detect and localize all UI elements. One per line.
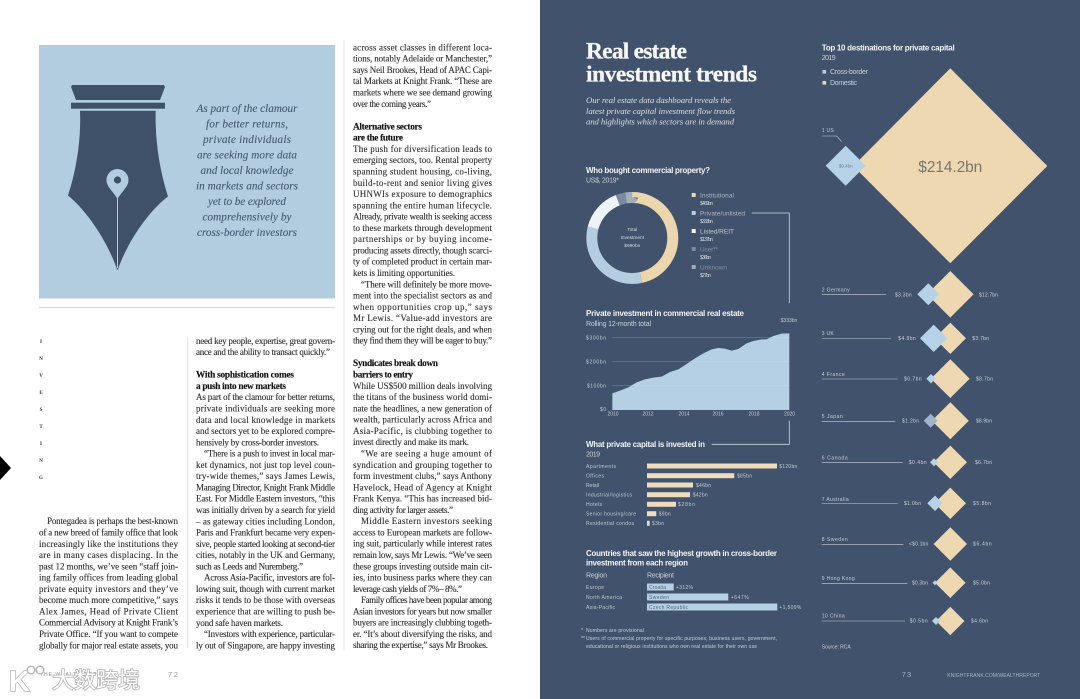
diamond: 8 Sweden: $6.4bn — [973, 542, 992, 548]
growth table bars: Czech Republic — [649, 605, 688, 611]
subheading: Alternative sectors are the future — [353, 122, 422, 144]
article column 1: are in many cases displacing. In the — [39, 550, 178, 560]
donut chart: total investment: Total — [627, 227, 637, 233]
vertical section label: INVESTING: E — [39, 391, 43, 396]
article column 3: kets is limiting opportunities. — [353, 268, 455, 278]
article column 3: access to European markets are follow- — [353, 527, 492, 537]
article column 3: Middle Eastern investors seeking — [361, 516, 492, 526]
article column 3: these groups investing outside main cit- — [353, 561, 492, 571]
area chart: 2020 — [784, 412, 795, 418]
subheading: Alternative sectors are the future: Alternative sectors — [353, 122, 422, 132]
footnotes — [581, 628, 777, 650]
heading: countries: Countries that saw the highest growth in cross-border — [586, 549, 777, 558]
vertical section label: INVESTING: S — [40, 408, 43, 413]
area chart: 2012 — [642, 412, 654, 418]
article column 3: ty of completed product in certain mar- — [353, 257, 492, 267]
diamond: 5 Japan — [822, 402, 992, 439]
article column 3: wealth, particularly across Africa and — [353, 415, 492, 425]
article column 1: ing family offices from leading global — [39, 573, 178, 583]
footnotes: * — [581, 628, 583, 634]
article column 2: was initially driven by a search for yield — [196, 505, 336, 515]
article column 3 — [353, 42, 492, 650]
bar chart: sectors: Industrial/logistics — [586, 492, 632, 498]
article column 3: Mr Lewis. “Value-add investors are — [353, 313, 492, 323]
panel: pen nib pull quote — [39, 45, 335, 298]
icon: fountain pen nib with location pin — [68, 85, 168, 270]
subheading: With sophistication comes a push into new markets — [196, 371, 294, 392]
left page footer: 72 — [168, 670, 178, 679]
intro text: Our real estate data dashboard reveals the — [586, 95, 731, 105]
legend: cross-border and domestic — [822, 69, 869, 87]
vertical section label: INVESTING: V — [39, 374, 43, 379]
article column 1: Commercial Advisory at Knight Frank’s — [39, 618, 178, 628]
heading: countries — [586, 549, 777, 568]
pull quote text: private individuals — [202, 134, 292, 146]
article column 3: leverage cash yields of 7%– 8%.” — [353, 584, 462, 594]
area chart — [586, 318, 798, 418]
article column 2: lowing suit, though with current market — [196, 584, 335, 594]
diamond: 1 US: $214.2bn — [918, 159, 982, 176]
bar chart: sectors: $28bn — [678, 502, 695, 508]
donut legend: $27bn — [700, 273, 711, 279]
article column 2: Managing Director, Knight Frank Middle — [196, 482, 335, 492]
article column 3: While US$500 million deals involving — [353, 381, 492, 391]
bar chart: sectors: Offices — [586, 474, 604, 480]
panel: countries with highest growth — [586, 549, 802, 611]
diamond: 4 France: 4 France — [822, 372, 845, 378]
diamond: 1 US: 1 US — [822, 128, 834, 134]
article column 3: partnerships or by buying income- — [353, 234, 492, 244]
article column 3: they find them they will be eager to buy.” — [353, 336, 492, 346]
article column 3: emerging sectors, too. Rental property — [353, 155, 492, 165]
heading: private investment — [586, 309, 745, 328]
vertical section label: INVESTING: G — [39, 476, 43, 481]
bar chart: sectors: $120bn — [779, 464, 798, 470]
article column 1: Pontegadea is perhaps the best-known — [47, 516, 178, 526]
diamond: 2 Germany: 2 Germany — [822, 288, 850, 294]
article column 1: Alex James, Head of Private Client — [39, 606, 178, 616]
article column 2: private individuals are seeking more — [196, 404, 335, 414]
diamond: 8 Sweden: <$0.1bn — [909, 542, 929, 548]
vertical section label: INVESTING: I — [40, 340, 42, 345]
heading: private investment: Private investment in commercial real estate — [586, 309, 745, 318]
diamond: 6 Canada — [822, 446, 992, 479]
donut legend: Listed/REIT — [700, 228, 734, 235]
article column 3: er. “It’s about diversifying the risks, and — [353, 629, 492, 639]
article column 2: experience that are willing to push be- — [196, 606, 335, 616]
donut legend: User** — [700, 246, 718, 253]
article column 2 — [195, 336, 336, 650]
article column 3: syndication and grouping together to — [353, 460, 492, 470]
left page footer — [40, 670, 178, 679]
footnotes: Users of commercial property for specific purposes; business users, government, — [586, 636, 777, 642]
pull quote text: As part of the clamour — [196, 103, 298, 115]
article column 3: Already, private wealth is seeking access — [353, 212, 492, 222]
article column 3: invest directly and make its mark. — [353, 437, 469, 447]
icon: black section arrow — [0, 456, 11, 480]
article column 3: Frank Kenya. “This has increased bid- — [353, 494, 492, 504]
diamond: 7 Australia: $5.8bn — [973, 501, 991, 507]
heading: who bought: Who bought commercial property? — [586, 166, 710, 175]
title: Real estate investment trends: investment trends — [586, 62, 757, 88]
article column 2: such as Leeds and Nuremberg.” — [196, 561, 303, 571]
article column 2: Paris and Frankfurt became very expen- — [196, 528, 335, 538]
donut legend: $36bn — [700, 255, 711, 261]
bar chart: sectors: Residential condos — [586, 521, 634, 527]
heading: top 10 destinations — [822, 44, 955, 62]
bar chart: sectors — [586, 464, 798, 527]
diamond: 3 UK: 3 UK — [822, 331, 834, 337]
pull quote text: are seeking more data — [197, 150, 297, 162]
article column 3: the titans of the business world domi- — [353, 392, 492, 402]
bar chart: sectors: Retail — [586, 483, 599, 489]
pull quote text: yet to be explored — [207, 196, 286, 208]
right page footer — [902, 670, 1040, 679]
article column 3: says Neil Brookes, Head of APAC Capi- — [353, 65, 492, 75]
diamond: 5 Japan: $8.9bn — [976, 418, 992, 424]
article column 2: As part of the clamour for better returns, — [196, 392, 335, 402]
bar chart: sectors: $42bn — [693, 492, 708, 498]
donut legend — [692, 192, 745, 279]
vertical section label: INVESTING: I — [40, 442, 42, 447]
growth table bars: Asia-Pacific — [586, 605, 616, 611]
footnotes: Numbers are provisional — [586, 628, 644, 634]
article column 2: “There is a push to invest in local mar- — [204, 449, 335, 459]
legend: cross-border and domestic: Cross-border — [830, 69, 869, 76]
heading: top 10 destinations: 2019 — [822, 55, 836, 62]
article column 1: of a new breed of family office that look — [39, 528, 178, 538]
diamond: 5 Japan: $1.2bn — [902, 418, 919, 424]
donut legend: Institutional — [700, 192, 735, 199]
growth table bars: +312% — [676, 585, 694, 591]
vertical section label: INVESTING: T — [39, 425, 43, 430]
diamond: 9 Hong Kong: $0.3bn — [912, 580, 928, 586]
article column 3: spanning the entire human lifecycle. — [353, 200, 492, 210]
area chart: $100bn — [587, 383, 606, 389]
article column 1: private equity investors and they’ve — [39, 584, 178, 594]
growth table bars: Sweden — [649, 595, 669, 601]
diamond: 2 Germany: $12.7bn — [979, 292, 998, 298]
article column 2: – as gateway cities including London, — [195, 516, 335, 526]
growth table bars — [586, 572, 802, 611]
heading: who bought — [586, 166, 710, 184]
area chart: $200bn — [586, 359, 606, 365]
diamond: 7 Australia: $1.0bn — [904, 501, 921, 507]
diamond: 10 China: $0.5bn — [910, 619, 928, 625]
heading: what private capital: What private capital is invested in — [586, 440, 705, 449]
bar chart: sectors: $85bn — [737, 474, 752, 480]
article column 3: Asian investors for years but now smaller — [353, 606, 492, 616]
bar chart: sectors: $46bn — [696, 483, 711, 489]
article column 3: Havelock, Head of Agency at Knight — [353, 482, 492, 492]
area chart: $300bn — [586, 336, 606, 342]
watermark: 大数跨境 logo: K — [9, 666, 30, 698]
subheading: With sophistication comes a push into new markets: a push into new markets — [196, 382, 286, 392]
article column 2: East. For Middle Eastern investors, “this — [196, 494, 335, 504]
subheading: Syndicates break down barriers to entry — [353, 359, 439, 380]
diamond: 10 China: $4.6bn — [971, 619, 988, 625]
diamond: 7 Australia — [822, 488, 991, 519]
bar chart: sectors: $9bn — [659, 512, 671, 518]
diamond: 8 Sweden — [822, 527, 992, 561]
subheading: Syndicates break down barriers to entry: Syndicates break down — [353, 359, 439, 369]
intro text — [586, 95, 736, 126]
watermark: 大数跨境 logo: 大数跨境 — [52, 668, 140, 693]
area chart: 2010 — [607, 412, 619, 418]
growth table bars: Croatia — [649, 585, 666, 591]
article column 3: over the coming years.” — [353, 99, 431, 109]
article column 3: when opportunities crop up,” says — [353, 302, 492, 312]
article column 3: tions, notably Adelaide or Manchester,” — [353, 54, 492, 64]
subheading: Alternative sectors are the future: are the future — [353, 134, 403, 144]
bar chart: sectors: Apartments — [586, 464, 616, 470]
area chart: $0 — [600, 407, 606, 413]
pull quote text: and local knowledge — [200, 165, 294, 177]
pull quote text: for better returns, — [206, 118, 288, 130]
right page footer: KNIGHTFRANK.COM/WEALTHREPORT — [947, 673, 1040, 679]
donut chart: total investment: Investment — [621, 235, 645, 241]
article column 2: yond safe haven markets. — [196, 618, 283, 628]
area chart: 2014 — [678, 412, 690, 418]
article column 1: past 12 months, we’ve seen “staff join- — [39, 561, 178, 571]
article column 3: UHNWIs exposure to demographics — [353, 189, 492, 199]
diamond: 4 France: $0.7bn — [904, 376, 922, 382]
article column 2: Across Asia-Pacific, investors are fol- — [204, 573, 335, 583]
diamond: 9 Hong Kong — [822, 567, 990, 598]
donut legend: $333bn — [700, 219, 713, 225]
article column 3: Family offices have been popular among — [361, 595, 492, 605]
article column 2: try-wide themes,” says James Lewis, — [196, 471, 335, 481]
article column 3: remain low, says Mr Lewis. “We’ve seen — [353, 550, 492, 560]
diamond: 9 Hong Kong: $5.0bn — [973, 580, 990, 586]
diamond: 7 Australia: 7 Australia — [822, 497, 849, 503]
diamond: 6 Canada: 6 Canada — [822, 456, 848, 462]
article column 3: sharing the expertise,” says Mr Brookes. — [353, 640, 488, 650]
article column 2: sive, people started looking at second-tier — [196, 539, 335, 549]
article column 1: become much more competitive,” says — [39, 595, 178, 605]
article column 3: markets where we see demand growing — [353, 88, 492, 98]
article column 3: build-to-rent and senior living gives — [353, 178, 492, 188]
diamond: 1 US: $9.4bn — [839, 164, 853, 168]
source note: Source: RCA — [822, 644, 851, 650]
article column 3: crying out for the right deals, and when — [353, 324, 492, 334]
article column 1 — [39, 516, 178, 650]
diamond: 1 US — [822, 68, 1047, 263]
area chart: 2016 — [712, 412, 724, 418]
article column 3: ding activity for larger assets.” — [353, 505, 453, 515]
heading: what private capital: 2019 — [586, 452, 600, 458]
diamond: 3 UK: $4.8bn — [898, 336, 916, 342]
article column 3: The push for diversification leads to — [353, 144, 492, 154]
heading: top 10 destinations: Top 10 destinations for private capital — [822, 44, 955, 52]
heading: private investment: Rolling 12-month total — [586, 321, 651, 328]
footnotes: ** — [581, 636, 585, 642]
diamond: 3 UK — [822, 323, 989, 354]
donut legend: Private/unlisted — [700, 210, 745, 217]
article column 2: data and local knowledge in markets — [196, 415, 335, 425]
diamond: 6 Canada: $0.4bn — [909, 460, 927, 466]
article column 3: ment into the specialist sectors as and — [353, 291, 492, 301]
subheading: Syndicates break down barriers to entry: barriers to entry — [353, 370, 413, 380]
article column 2: ket dynamics, not just top level coun- — [196, 460, 335, 470]
donut chart: total investment: $990bn — [624, 243, 641, 249]
pull quote text: cross-border investors — [197, 227, 298, 239]
article column 3: form investment clubs,” says Anthony — [353, 471, 492, 481]
diamond: 9 Hong Kong: 9 Hong Kong — [822, 576, 855, 582]
growth table bars: Europe — [586, 585, 604, 591]
bar chart: sectors: $3bn — [652, 521, 664, 527]
heading: what private capital — [586, 440, 705, 458]
article column 2: risks it tends to be those with overseas — [196, 595, 335, 605]
left page footer: THE WEALTH REPORT — [40, 672, 110, 678]
article column 2: need key people, expertise, great govern- — [196, 336, 335, 346]
diamond: 4 France — [822, 359, 993, 398]
article column 3: spanning student housing, co-living, — [353, 166, 492, 176]
article column 1: globally for major real estate assets, you — [39, 640, 178, 650]
pull quote text: in markets and sectors — [196, 180, 299, 192]
article column 3: ing suit, particularly while interest rates — [353, 539, 492, 549]
article column 3: to these markets through development — [353, 223, 492, 233]
growth table bars: +1,509% — [779, 605, 802, 611]
intro text: latest private capital investment flow trends — [586, 106, 736, 116]
pull quote text — [196, 103, 299, 239]
donut legend: Unknown — [700, 264, 727, 271]
bar chart: sectors: Hotels — [586, 502, 602, 508]
diamond: 3 UK: $3.7bn — [972, 336, 989, 342]
vertical section label: INVESTING: N — [39, 357, 43, 362]
watermark: 大数跨境 logo — [9, 666, 140, 698]
panel: who bought commercial property — [586, 166, 745, 279]
panel: what private capital is invested in — [586, 440, 798, 527]
article column 3: Asia-Pacific, is clubbing together to — [353, 426, 492, 436]
diamond: 2 Germany — [822, 271, 998, 318]
subheading: With sophistication comes a push into new markets: With sophistication comes — [196, 371, 294, 381]
article column 3: producing assets directly, though scarci- — [353, 245, 492, 255]
article column 3: “There will definitely be more move- — [361, 279, 492, 289]
article column 3: tal Markets at Knight Frank. “These are — [353, 76, 492, 86]
article column 3: “We are seeing a huge amount of — [361, 448, 492, 458]
donut legend: $137bn — [700, 237, 713, 243]
diamond: 10 China: 10 China — [822, 614, 845, 620]
growth table bars: +647% — [731, 595, 749, 601]
growth table bars: Recipient — [647, 572, 674, 580]
panel: top 10 destinations — [822, 44, 1047, 650]
area chart: 2018 — [748, 412, 760, 418]
article column 2: hensively by cross-border investors. — [196, 437, 319, 447]
article column 3: across asset classes in different loca- — [353, 42, 492, 52]
article column 2: and sectors yet to be explored compre- — [196, 426, 335, 436]
diamond: 2 Germany: $3.3bn — [895, 292, 912, 298]
article column 3: ies, into business parks where they can — [353, 573, 492, 583]
pull quote text: comprehensively by — [202, 212, 292, 224]
donut chart: total investment — [592, 198, 673, 278]
growth table bars: Region — [586, 572, 607, 580]
right page footer: 73 — [902, 670, 911, 679]
article column 3: buyers are increasingly clubbing togeth- — [353, 618, 492, 628]
diamond: 8 Sweden: 8 Sweden — [822, 537, 848, 543]
vertical section label: INVESTING: N — [39, 459, 43, 464]
article column 3: nate the headlines, a new generation of — [353, 403, 492, 413]
article column 2: ance and the ability to transact quickly.” — [196, 347, 330, 357]
heading: countries: investment from each region — [586, 558, 688, 568]
area chart: $333bn — [781, 318, 798, 324]
donut legend: $469bn — [700, 201, 713, 207]
article column 1: increasingly like the institutions they — [39, 539, 178, 549]
panel: private investment area chart — [586, 309, 798, 418]
diamond: 4 France: $8.7bn — [976, 376, 993, 382]
diamond: 10 China — [822, 607, 988, 635]
growth table bars: North America — [586, 595, 622, 601]
footnotes: educational or religious institutions who own real estate for their own use — [586, 644, 757, 650]
vertical section label: INVESTING — [39, 340, 43, 481]
title: Real estate investment trends: Real estate — [586, 38, 687, 64]
diamond: 5 Japan: 5 Japan — [822, 414, 843, 420]
article column 1: Private Office. “If you want to compete — [39, 629, 178, 639]
connector: private/unlisted to charts — [712, 213, 789, 444]
title: Real estate investment trends — [586, 38, 757, 88]
heading: who bought: US$, 2019* — [586, 178, 619, 184]
diamond: 6 Canada: $6.7bn — [975, 460, 992, 466]
article column 2: “Investors with experience, particular- — [204, 629, 335, 639]
article column 2: ly out of Singapore, are happy investing — [196, 640, 336, 650]
bar chart: sectors: Senior housing/care — [586, 512, 636, 518]
article column 2: cities, notably in the UK and Germany, — [196, 550, 335, 560]
legend: cross-border and domestic: Domestic — [830, 80, 858, 87]
intro text: and highlights which sectors are in demand — [586, 116, 735, 126]
